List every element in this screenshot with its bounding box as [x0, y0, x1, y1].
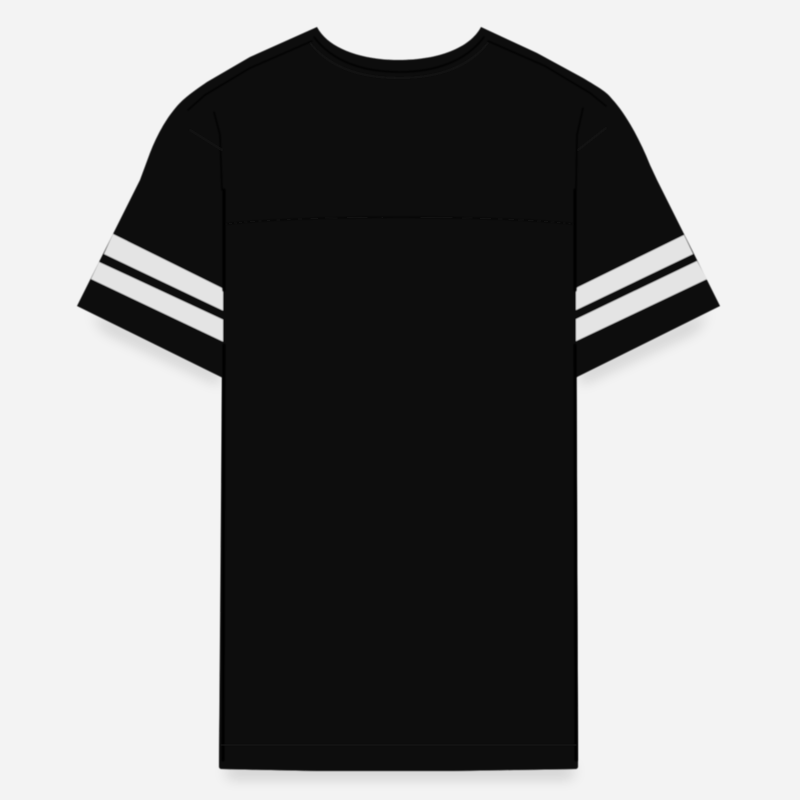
shirt silhouette with sleeves [77, 27, 720, 771]
upper left stripe [104, 234, 226, 312]
stitching and seams [188, 37, 606, 760]
yoke panel [205, 45, 590, 224]
upper right stripe [572, 235, 693, 312]
body side shading [222, 190, 226, 290]
lower body panel [219, 217, 578, 771]
collar ribbing [310, 43, 488, 78]
yoke seam [226, 217, 574, 224]
shoulder seams [188, 41, 312, 110]
lower right stripe [572, 261, 707, 343]
right sleeve stripes [572, 235, 707, 343]
left sleeve stripes [91, 234, 226, 343]
armhole seams [214, 112, 222, 190]
lower left stripe [91, 262, 226, 343]
shadow under shirt [92, 312, 708, 778]
hem stitching [221, 744, 576, 746]
